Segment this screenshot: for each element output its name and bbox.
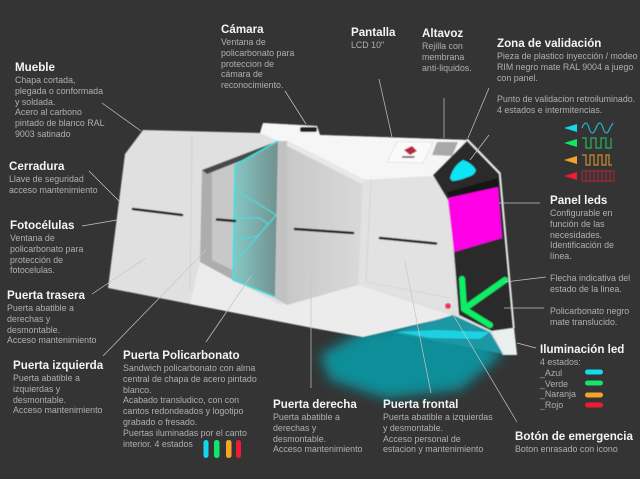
label: Cámara: Ventana de — [221, 37, 266, 47]
label: Puerta Policarbonato: Puertas iluminadas por el canto — [123, 428, 247, 438]
label: Cerradura: Cerradura — [9, 160, 64, 173]
label: Fotocélulas: Ventana de — [10, 233, 55, 243]
label: Policarbonato negro: Policarbonato negro — [550, 306, 629, 316]
label: Puerta izquierda — [13, 359, 104, 415]
label: Mueble: 9003 satinado — [15, 129, 71, 139]
label: Iluminación led — [540, 343, 624, 410]
label: Puerta derecha — [273, 398, 362, 454]
label: Puerta Policarbonato: Acabado transludico, con con — [123, 395, 239, 405]
handles — [133, 209, 436, 244]
label: Flecha indicativa: estado de la linea. — [550, 284, 622, 294]
label: Altavoz — [422, 27, 472, 73]
right door recess — [287, 142, 365, 305]
label: Mueble: Acero al carbono — [15, 107, 82, 117]
magenta led panel — [448, 187, 502, 252]
label: Puerta trasera: desmontable. — [7, 325, 60, 335]
label: Zona de validación: RIM negro mate RAL 9004 a juego — [497, 62, 633, 72]
green state — [564, 139, 577, 147]
label: Iluminación led: 4 estados: — [540, 357, 581, 367]
label: Policarbonato negro — [550, 306, 629, 327]
label: Puerta trasera: Puerta abatible a — [7, 303, 74, 313]
label: Botón de emergencia: Boton enrasado con icono — [515, 444, 618, 454]
label: Cerradura — [9, 160, 98, 195]
label: Panel leds: Panel leds — [550, 194, 607, 207]
label: Puerta derecha: Acceso mantenimiento — [273, 444, 362, 454]
label: Cámara: reconocimiento. — [221, 80, 283, 90]
label: Puerta izquierda: Puerta abatible a — [13, 373, 80, 383]
label: Altavoz: Rejilla con — [422, 41, 463, 51]
label: Puerta trasera: derechas y — [7, 314, 50, 324]
label: Puerta izquierda: Puerta izquierda — [13, 359, 103, 372]
label: Fotocélulas: Fotocélulas — [10, 219, 74, 232]
label: Cámara — [221, 23, 294, 90]
label: Cerradura: Llave de seguridad — [9, 174, 84, 184]
label: Iluminación led: _Rojo — [540, 400, 563, 410]
cyan validation point — [450, 160, 476, 181]
cyan state — [564, 124, 577, 132]
label: Iluminación led: _Naranja — [540, 389, 576, 399]
validation state icons — [564, 123, 614, 181]
polycarbonate door — [233, 141, 278, 297]
label: Puerta Policarbonato: Sandwich policarbonato con alma — [123, 363, 255, 373]
label: Altavoz: Altavoz — [422, 27, 463, 40]
label: Puerta izquierda: desmontable. — [13, 395, 66, 405]
label: Panel leds: Configurable en — [550, 208, 612, 218]
label: Cerradura: acceso mantenimiento — [9, 185, 98, 195]
label: Panel leds: función de las — [550, 219, 605, 229]
label: Puerta Policarbonato: grabado o fresado. — [123, 417, 197, 427]
floor light glow — [320, 312, 502, 398]
label: Panel leds: Identificación de — [550, 240, 614, 250]
label: Puerta trasera: Puerta trasera — [7, 289, 85, 302]
label: Puerta frontal: y desmontable. — [383, 423, 443, 433]
label: Fotocélulas — [10, 219, 84, 275]
label: Zona de validación: Punto de validacion retroiluminado. — [497, 94, 635, 104]
label: Mueble: plegada o conformada — [15, 86, 103, 96]
orange state — [564, 156, 577, 164]
label: Puerta izquierda: izquierdas y — [13, 384, 60, 394]
label: Panel leds: línea. — [550, 251, 572, 261]
machine body — [108, 123, 517, 355]
front door — [358, 176, 453, 310]
screen logo — [404, 146, 417, 155]
label: Botón de emergencia: Botón de emergencia — [515, 430, 633, 443]
label: Iluminación led: _Azul — [540, 368, 562, 378]
recess around polycarbonate door — [200, 141, 278, 297]
label: Cámara: Cámara — [221, 23, 264, 36]
label: Puerta derecha: Puerta derecha — [273, 398, 357, 411]
label: Zona de validación: 4 estados e intermitencias. — [497, 105, 602, 115]
label: Iluminación led: Iluminación led — [540, 343, 624, 356]
label: Policarbonato negro: mate translucido. — [550, 317, 617, 327]
label: Puerta trasera: Acceso mantenimiento — [7, 335, 96, 345]
red state — [564, 172, 577, 180]
label: Flecha indicativa: Flecha indicativa del — [550, 273, 630, 283]
label: Puerta izquierda: Acceso mantenimiento — [13, 405, 102, 415]
label: Zona de validación: con panel. — [497, 73, 538, 83]
label: Pantalla — [351, 26, 396, 50]
label: Zona de validación: Zona de validación — [497, 37, 601, 50]
label: Puerta Policarbonato: central de chapa de acero pintado — [123, 374, 257, 384]
speaker grille — [432, 142, 458, 156]
label: Mueble: Chapa cortada, — [15, 75, 75, 85]
base wedge lit — [492, 328, 517, 355]
label: Puerta frontal: Puerta frontal — [383, 398, 458, 411]
label: Fotocélulas: fotocelulas. — [10, 265, 55, 275]
label: Altavoz: anti-liquidos. — [422, 63, 472, 73]
lower white lip — [190, 262, 453, 337]
label: Pantalla: Pantalla — [351, 26, 395, 39]
top white band — [260, 123, 467, 180]
label: Puerta Policarbonato: interior. 4 estados — [123, 439, 193, 449]
label: Puerta derecha: desmontable. — [273, 434, 326, 444]
door light state bars — [204, 440, 241, 458]
label: Puerta derecha: Puerta abatible a — [273, 412, 340, 422]
label: Mueble: pintado de blanco RAL — [15, 118, 104, 128]
leader lines — [82, 79, 546, 422]
label: Cámara: cámara de — [221, 69, 263, 79]
label: Puerta trasera — [7, 289, 96, 345]
emergency button — [445, 303, 451, 309]
label: Zona de validación: Pieza de plastico inyección / modeo — [497, 51, 638, 61]
label: Panel leds — [550, 194, 614, 261]
label: Iluminación led: _Verde — [540, 379, 568, 389]
led colour legend bars — [585, 370, 603, 408]
label: Cámara: proteccion de — [221, 59, 274, 69]
label: Puerta Policarbonato — [123, 349, 257, 449]
label: Flecha indicativa — [550, 273, 630, 294]
label: Cámara: policarbonato para — [221, 48, 294, 58]
label: Fotocélulas: protección de — [10, 255, 63, 265]
label: Mueble — [15, 61, 104, 139]
label: Fotocélulas: policarbonato para — [10, 244, 83, 254]
green arrow — [462, 279, 505, 325]
central post — [275, 141, 287, 305]
camera window — [300, 127, 317, 132]
label: Puerta frontal: estacion y mantenimiento — [383, 444, 483, 454]
label: Puerta Policarbonato: cantos redondeados y logotipo — [123, 406, 243, 416]
label: Puerta frontal: Puerta abatible a izquierdas — [383, 412, 493, 422]
label: Altavoz: membrana — [422, 52, 464, 62]
label: Panel leds: necesidades. — [550, 230, 602, 240]
label: Puerta frontal: Acceso personal de — [383, 434, 461, 444]
label: Pantalla: LCD 10" — [351, 40, 384, 50]
screen card — [387, 142, 433, 163]
dark validation panel — [433, 141, 513, 331]
left door seam — [190, 136, 192, 290]
label: Puerta Policarbonato: Puerta Policarbonato — [123, 349, 240, 362]
label: Puerta frontal — [383, 398, 493, 454]
label: Mueble: y soldada. — [15, 97, 55, 107]
label: Mueble: Mueble — [15, 61, 55, 74]
label: Zona de validación — [497, 37, 638, 115]
label: Puerta Policarbonato: blanco. — [123, 385, 152, 395]
label: Puerta derecha: derechas y — [273, 423, 316, 433]
label: Botón de emergencia — [515, 430, 634, 454]
